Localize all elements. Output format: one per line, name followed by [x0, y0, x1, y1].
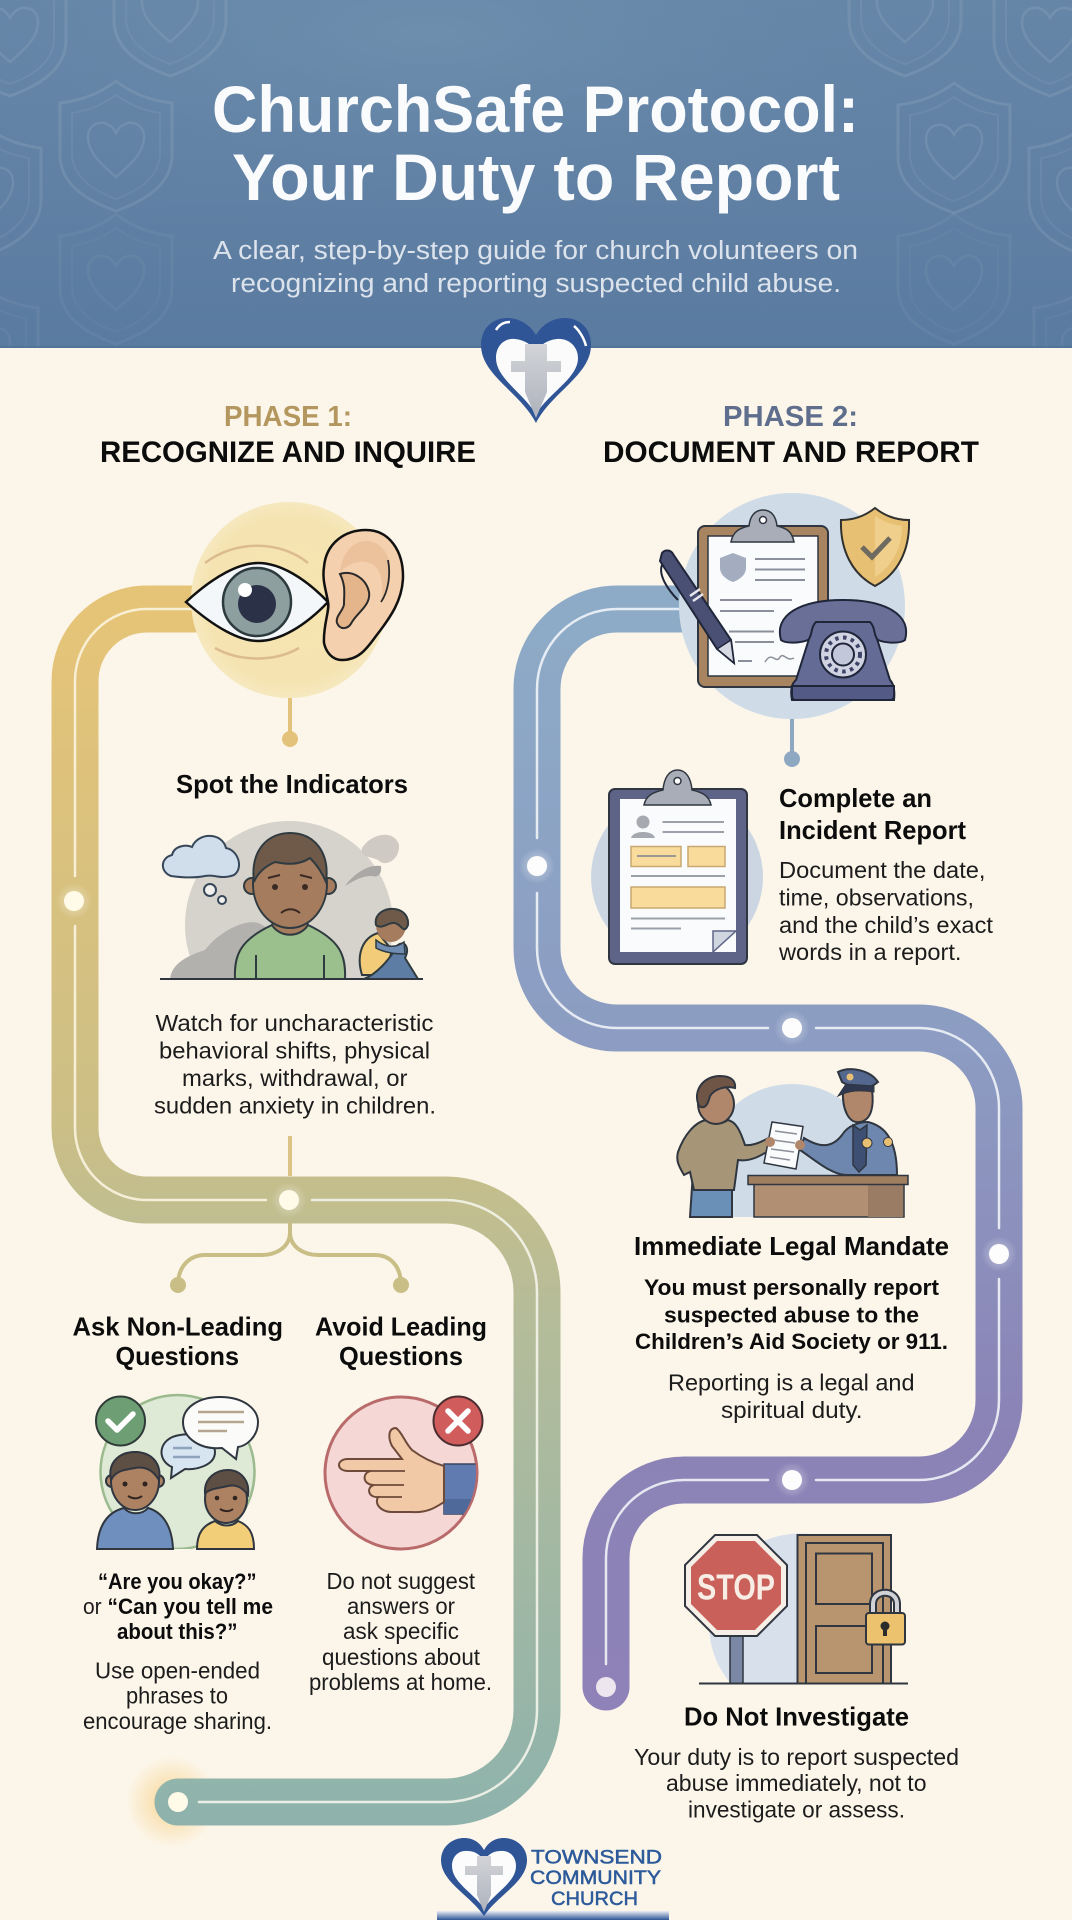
icon: person handing report to officer — [676, 1068, 909, 1218]
church name: COMMUNITY — [530, 1868, 661, 1889]
gold shield — [841, 508, 909, 586]
text: immediate legal mandate: suspected abuse to the — [664, 1302, 919, 1328]
desk — [748, 1176, 908, 1217]
text: avoid leading: ask specific — [343, 1618, 459, 1644]
text: complete an incident report: words in a report. — [778, 939, 962, 965]
text: spot the indicators: sudden anxiety in children. — [154, 1092, 436, 1118]
icon: footer heart — [441, 1838, 527, 1916]
church name: TOWNSEND — [531, 1848, 662, 1868]
text: ask non-leading: “Are you okay?” — [98, 1569, 256, 1594]
text: immediate legal mandate: You must personally report — [644, 1275, 940, 1300]
heading: avoid leading questions: Questions — [339, 1341, 463, 1371]
heading: ask non-leading questions: Questions — [116, 1341, 239, 1371]
header banner — [0, 0, 1072, 416]
locked door — [798, 1535, 905, 1684]
x badge — [434, 1396, 482, 1446]
child — [197, 1470, 254, 1549]
boy — [235, 833, 345, 979]
path nodes — [519, 848, 1017, 1697]
text: do not investigate: Do Not Investigate — [684, 1702, 909, 1732]
connector: branch to question cards — [170, 1136, 409, 1293]
end-of-path glow — [126, 1756, 218, 1848]
text: avoid leading — [309, 1568, 492, 1695]
text: ask non-leading: phrases to — [126, 1682, 228, 1708]
title: Your Duty to Report — [232, 140, 840, 214]
text: ask non-leading: encourage sharing. — [83, 1708, 272, 1734]
text: immediate legal mandate — [634, 1231, 949, 1423]
adult — [97, 1452, 173, 1549]
subtitle: A clear, step-by-step guide for church volunteers on — [213, 237, 858, 265]
connector: documents to step — [784, 719, 800, 767]
text: immediate legal mandate: Immediate Legal Mandate — [634, 1231, 949, 1261]
text: ask non-leading: about this?” — [117, 1619, 238, 1644]
step: spot the indicators heading: Spot the Indicators — [176, 769, 408, 799]
officer — [800, 1069, 897, 1175]
check badge — [96, 1396, 145, 1446]
heading: phase 1: RECOGNIZE AND INQUIRE — [100, 436, 476, 469]
text: do not investigate — [634, 1702, 959, 1822]
heading: ask non-leading questions — [72, 1312, 283, 1371]
text: complete an incident report: Document the date, — [779, 857, 986, 883]
text: complete an incident report: Complete an — [779, 783, 932, 813]
path: phase 2 — [519, 609, 1017, 1697]
text: do not investigate: investigate or assess. — [688, 1796, 905, 1822]
heading: avoid leading questions: Avoid Leading — [315, 1312, 487, 1342]
handed paper — [764, 1122, 805, 1169]
heading: phase 2: DOCUMENT AND REPORT — [603, 436, 979, 469]
icon: stop sign and locked door — [684, 1534, 908, 1684]
text: immediate legal mandate: spiritual duty. — [721, 1397, 862, 1423]
text: avoid leading: answers or — [347, 1593, 455, 1619]
subtitle: recognizing and reporting suspected child abuse. — [231, 270, 841, 298]
small speech bubble — [162, 1434, 215, 1478]
large speech bubble — [183, 1397, 258, 1459]
heading: avoid leading questions — [315, 1312, 487, 1371]
text: ask non-leading: or “Can you tell me — [83, 1594, 273, 1619]
text: complete an incident report: and the child’s exact — [779, 912, 994, 938]
text: complete an incident report: time, observations, — [779, 884, 974, 910]
church name — [530, 1848, 662, 1910]
text: complete an incident report — [778, 783, 994, 965]
text: avoid leading: Do not suggest — [326, 1568, 476, 1594]
clipboard — [698, 510, 828, 687]
text: avoid leading: questions about — [322, 1644, 481, 1670]
icon: incident report form — [591, 770, 763, 964]
title: ChurchSafe Protocol: — [212, 72, 859, 146]
text: avoid leading: problems at home. — [309, 1669, 492, 1695]
text: ask non-leading — [83, 1569, 273, 1734]
text: complete an incident report: Incident Report — [779, 815, 966, 845]
text: do not investigate: Your duty is to report suspected — [634, 1744, 959, 1770]
heading: phase 1 — [100, 401, 476, 469]
text: ask non-leading: Use open-ended — [95, 1658, 260, 1684]
icon: eye and ear — [186, 502, 403, 698]
path: phase 1 — [56, 609, 537, 1812]
stop sign — [685, 1535, 787, 1636]
church name: CHURCH — [551, 1889, 638, 1910]
path nodes — [56, 883, 307, 1812]
heading: phase 1: PHASE 1: — [224, 401, 352, 433]
text: immediate legal mandate: Children’s Aid Society or 911. — [635, 1329, 948, 1354]
icon: pointing hand — [325, 1396, 482, 1549]
small child — [360, 908, 418, 979]
icon: heart and cross emblem — [481, 318, 591, 423]
heading: phase 2 — [603, 401, 979, 469]
connector: eye to step — [282, 698, 298, 747]
thought cloud — [163, 836, 239, 904]
heading: phase 2: PHASE 2: — [723, 401, 858, 433]
person — [677, 1076, 775, 1217]
pen — [660, 550, 734, 663]
title — [212, 72, 859, 214]
illustration: worried children — [160, 821, 423, 980]
stop sign: STOP — [697, 1566, 775, 1608]
text: spot the indicators — [154, 1010, 436, 1118]
heading: ask non-leading questions: Ask Non-Leading — [72, 1312, 283, 1342]
footer: church logo — [437, 1838, 669, 1920]
subtitle — [213, 237, 858, 298]
text: spot the indicators: Watch for uncharacteristic — [156, 1010, 434, 1036]
text: spot the indicators: behavioral shifts, physical — [159, 1038, 430, 1064]
icon: clipboard, pen, shield and telephone — [660, 493, 909, 719]
text: do not investigate: abuse immediately, not to — [666, 1770, 926, 1796]
text: spot the indicators: marks, withdrawal, or — [182, 1065, 408, 1091]
telephone — [780, 600, 906, 700]
text: immediate legal mandate: Reporting is a legal and — [668, 1370, 914, 1396]
icon: adult and child talking — [96, 1395, 258, 1549]
